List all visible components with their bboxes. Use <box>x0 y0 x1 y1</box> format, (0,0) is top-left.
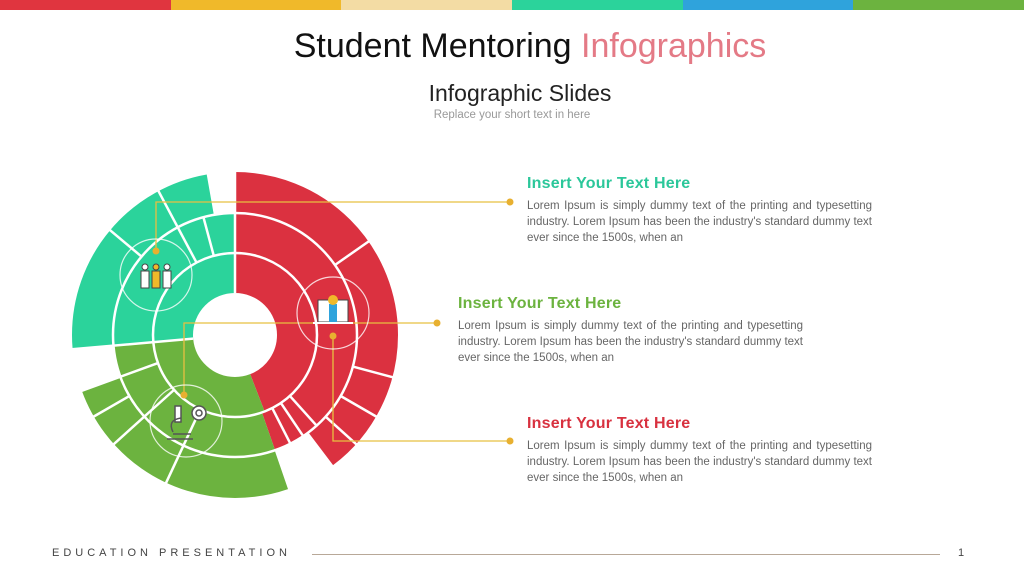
tagline: Replace your short text in here <box>434 109 590 121</box>
text block 1: Lorem Ipsum is simply dummy text of the printing and typesetting industry. Lorem Ipsum has been the industry's standard dummy text ever since the 1500s, when an <box>527 200 872 244</box>
text block 3 <box>527 415 872 484</box>
text block 3: Lorem Ipsum is simply dummy text of the printing and typesetting industry. Lorem Ipsum has been the industry's standard dummy text ever since the 1500s, when an <box>527 440 872 484</box>
text block 2 <box>458 295 803 364</box>
text block 2: Lorem Ipsum is simply dummy text of the printing and typesetting industry. Lorem Ipsum has been the industry's standard dummy text ever since the 1500s, when an <box>458 320 803 364</box>
footer label: EDUCATION PRESENTATION <box>52 547 291 559</box>
page number: 1 <box>958 547 964 559</box>
icon: microscope <box>149 384 223 458</box>
subtitle: Infographic Slides <box>429 80 611 106</box>
icon: people <box>119 238 193 312</box>
icon: laptop <box>296 276 370 350</box>
green segments <box>92 192 378 478</box>
teal segments <box>92 192 378 478</box>
text block 1: Insert Your Text Here <box>527 175 690 192</box>
text block 2: Insert Your Text Here <box>458 295 621 312</box>
text block 1 <box>527 175 872 244</box>
text block 3: Insert Your Text Here <box>527 415 690 432</box>
title: Student Mentoring Infographics <box>294 27 766 65</box>
red segments <box>92 192 378 478</box>
top color bar <box>0 0 1024 10</box>
